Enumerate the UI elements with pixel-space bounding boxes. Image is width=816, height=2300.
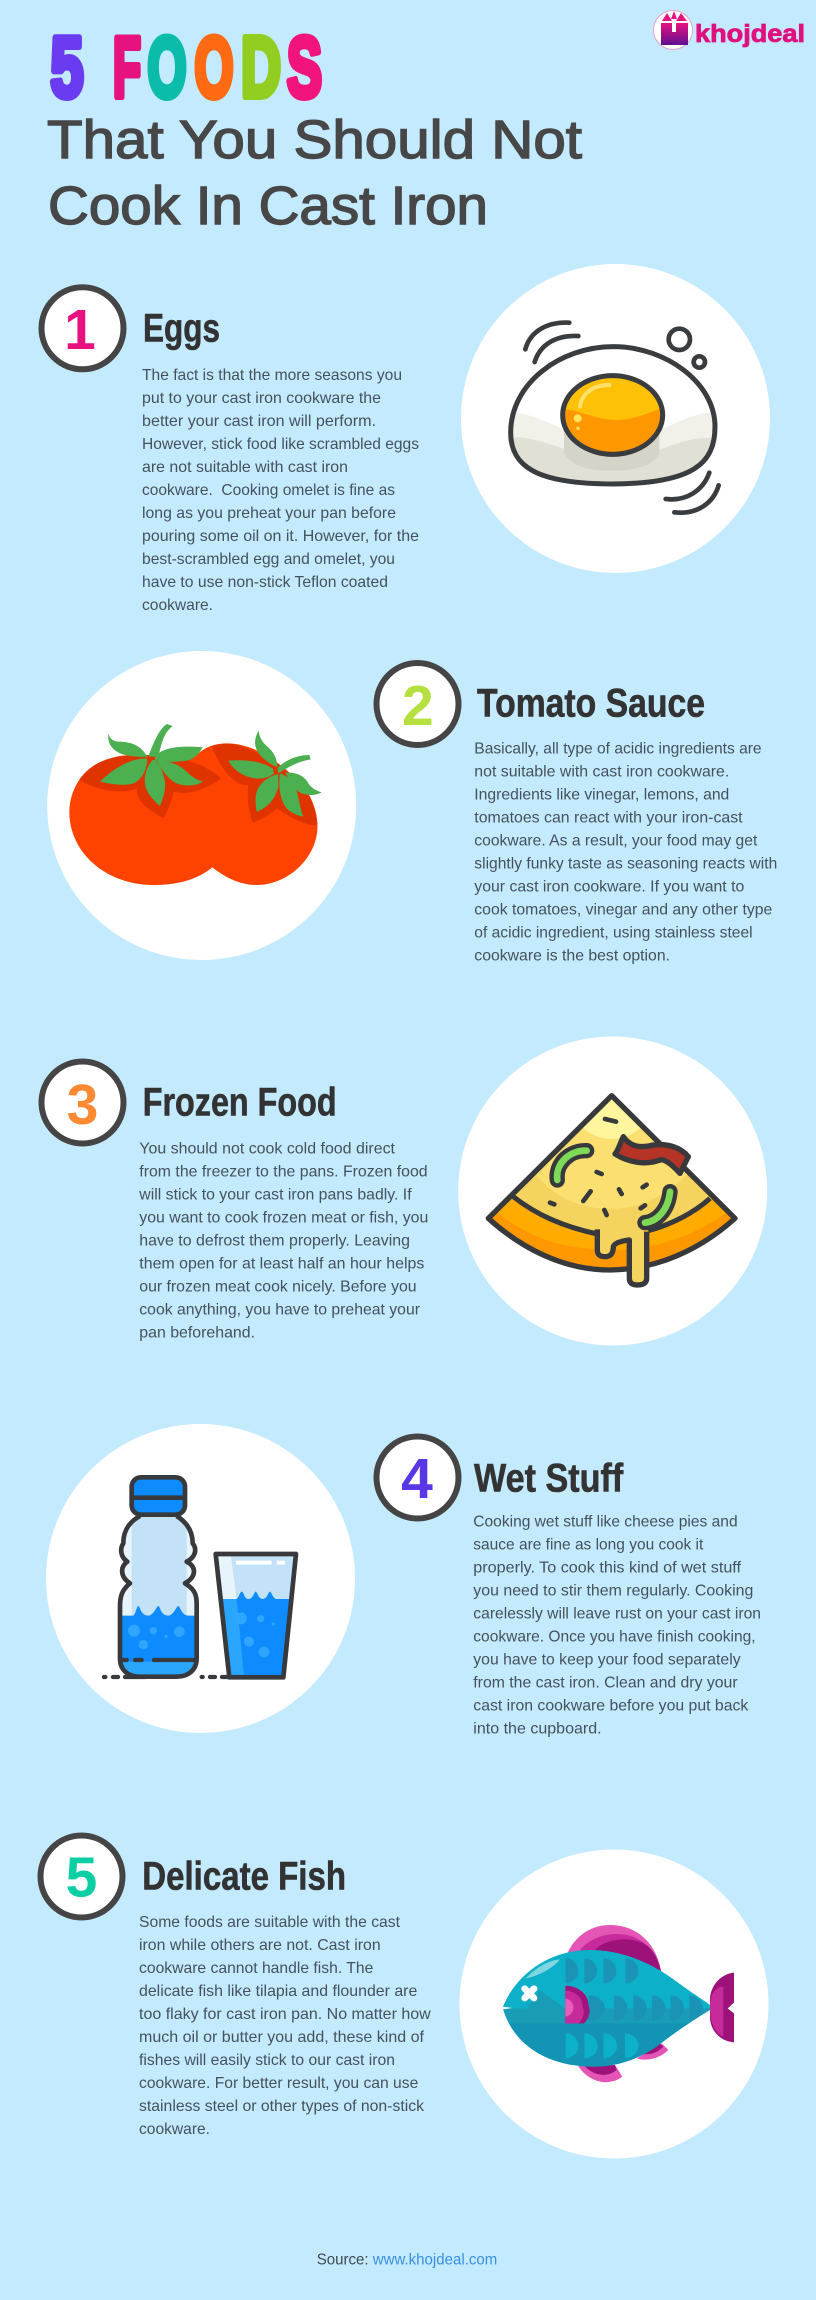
number badge 1: 1: [64, 298, 96, 362]
text block: delicate fish: delicate fish like tilapia and flounder are: [139, 1983, 417, 2000]
text block: wet stuff: properly. To cook this kind of wet stuff: [473, 1559, 742, 1576]
text block: wet stuff: from the cast iron. Clean and dry your: [473, 1674, 738, 1691]
text block: frozen food: from the freezer to the pans. Frozen food: [139, 1163, 428, 1180]
text block: eggs: best-scrambled egg and omelet, you: [142, 551, 395, 568]
icon: fried egg: [461, 264, 770, 573]
text block: tomato sauce: cookware. As a result, your food may get: [474, 832, 758, 849]
heading: Eggs: Eggs: [143, 307, 220, 351]
text block: tomato sauce: of acidic ingredient, using stainless steel: [474, 924, 753, 941]
subtitle: Cook In Cast Iron: [48, 176, 488, 236]
text block: frozen food: will stick to your cast iron pans badly. If: [138, 1186, 412, 1203]
text block: eggs: cookware.: [142, 597, 213, 614]
title: 5 FOODS: S: [287, 20, 322, 116]
text block: eggs: have to use non-stick Teflon coated: [142, 574, 388, 591]
number badge 3: 3: [67, 1073, 98, 1137]
text block: eggs: better your cast iron will perform.: [142, 413, 376, 430]
panel: 5 delicate fish: [40, 1836, 768, 2158]
title: 5 FOODS: D: [241, 20, 281, 116]
text block: tomato sauce: Ingredients like vinegar, lemons, and: [474, 786, 729, 803]
text block: delicate fish: cookware cannot handle fish. The: [139, 1960, 373, 1977]
text block: eggs: are not suitable with cast iron: [142, 459, 348, 476]
text block: frozen food: you want to cook frozen meat or fish, you: [139, 1209, 428, 1226]
logo: khojdeal: khojdeal: [695, 20, 805, 48]
text block: tomato sauce: cookware is the best option.: [474, 947, 670, 964]
text block: tomato sauce: your cast iron cookware. If you want to: [474, 878, 744, 895]
panel: 4 wet stuff: [46, 1424, 761, 1737]
title: 5 FOODS: F: [113, 20, 141, 116]
number badge 1: [42, 287, 124, 369]
text block: tomato sauce: slightly funky taste as seasoning reacts with: [474, 855, 777, 872]
panel: 2 tomato sauce: [47, 651, 777, 964]
text block: eggs: long as you preheat your pan before: [142, 505, 396, 522]
number badge 4: 4: [401, 1447, 433, 1511]
text block: eggs: However, stick food like scrambled eggs: [142, 436, 419, 453]
number badge 2: [376, 663, 458, 745]
subtitle: [47, 110, 582, 236]
text block: delicate fish: cookware. For better result, you can use: [139, 2075, 418, 2092]
text block: tomato sauce: [474, 740, 777, 964]
text block: wet stuff: cookware. Once you have finish cooking,: [473, 1628, 756, 1645]
text block: frozen food: pan beforehand.: [139, 1324, 255, 1341]
source footer: Source: www.khojdeal.com: [317, 2251, 497, 2268]
text block: tomato sauce: tomatoes can react with your iron-cast: [474, 809, 743, 826]
text block: wet stuff: carelessly will leave rust on your cast iron: [473, 1605, 761, 1622]
title: 5 FOODS: O: [148, 20, 186, 116]
text block: eggs: put to your cast iron cookware the: [142, 390, 381, 407]
panel: 1 eggs: [42, 264, 770, 614]
text block: wet stuff: sauce are fine as long you cook it: [473, 1536, 704, 1553]
number badge 5: [40, 1836, 122, 1918]
text block: delicate fish: Some foods are suitable with the cast: [139, 1914, 401, 1931]
text block: delicate fish: too flaky for cast iron pan. No matter how: [139, 2006, 431, 2023]
text block: eggs: The fact is that the more seasons you: [142, 367, 402, 384]
number badge 3: [42, 1062, 124, 1144]
number badge 2: 2: [402, 674, 434, 738]
text block: wet stuff: into the cupboard.: [473, 1720, 602, 1737]
heading: Tomato Sauce: Tomato Sauce: [477, 682, 705, 726]
heading: Wet Stuff: Wet Stuff: [474, 1457, 624, 1501]
text block: delicate fish: fishes will easily stick to our cast iron: [139, 2052, 395, 2069]
number badge 4: [376, 1436, 458, 1518]
text block: delicate fish: cookware.: [139, 2121, 210, 2138]
text block: eggs: [142, 367, 419, 614]
panel: 3 frozen food: [38, 1036, 768, 1346]
text block: tomato sauce: cook tomatoes, vinegar and any other type: [474, 901, 772, 918]
logo: khojdeal: [654, 10, 805, 50]
text block: tomato sauce: Basically, all type of acidic ingredients are: [474, 740, 762, 757]
text block: eggs: cookware. Cooking omelet is fine as: [142, 482, 395, 499]
text block: delicate fish: much oil or butter you add, these kind of: [139, 2029, 425, 2046]
title: 5 FOODS: [50, 20, 322, 116]
title: 5 FOODS: 5: [50, 20, 84, 116]
text block: eggs: pouring some oil on it. However, for the: [142, 528, 419, 545]
text block: frozen food: You should not cook cold food direct: [139, 1140, 396, 1157]
text block: wet stuff: cast iron cookware before you put back: [473, 1697, 749, 1714]
icon: water bottle and glass: [46, 1424, 355, 1733]
heading: Frozen Food: Frozen Food: [143, 1081, 337, 1125]
heading: Delicate Fish: Delicate Fish: [142, 1854, 346, 1898]
text block: delicate fish: iron while others are not. Cast iron: [139, 1937, 381, 1954]
text block: frozen food: our frozen meat cook nicely. Before you: [139, 1278, 417, 1295]
text block: frozen food: have to defrost them properly. Leaving: [139, 1232, 410, 1249]
number badge 5: 5: [66, 1846, 97, 1910]
text block: wet stuff: you have to keep your food separately: [473, 1651, 741, 1668]
subtitle: That You Should Not: [47, 110, 582, 170]
icon: pizza slice: [458, 1036, 768, 1346]
text block: delicate fish: [139, 1914, 431, 2138]
text block: wet stuff: you need to stir them regularly. Cooking: [473, 1582, 753, 1599]
text block: wet stuff: Cooking wet stuff like cheese pies and: [473, 1513, 738, 1530]
text block: frozen food: them open for at least half an hour helps: [139, 1255, 424, 1272]
title: 5 FOODS: O: [194, 20, 234, 116]
text block: delicate fish: stainless steel or other types of non-stick: [139, 2098, 425, 2115]
text block: wet stuff: [473, 1513, 761, 1737]
icon: tomatoes: [47, 651, 356, 960]
icon: fish: [460, 1850, 768, 2158]
text block: frozen food: cook anything, you have to preheat your: [139, 1301, 421, 1318]
text block: tomato sauce: not suitable with cast iron cookware.: [474, 763, 729, 780]
text block: frozen food: [138, 1140, 428, 1341]
